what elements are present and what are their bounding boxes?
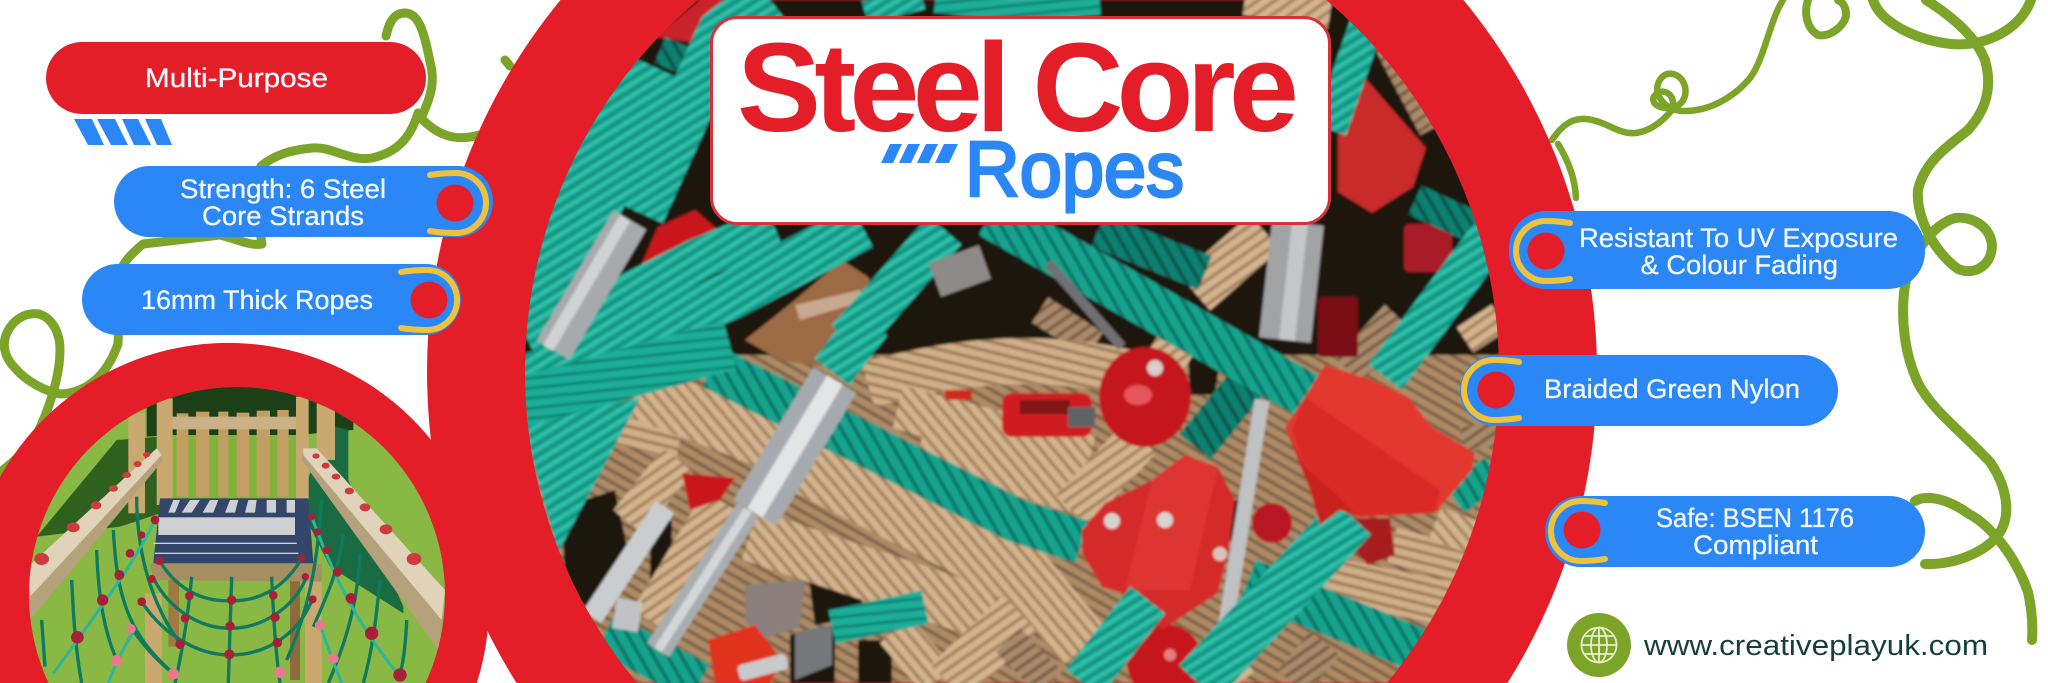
deck edge bbox=[150, 564, 322, 582]
grass bbox=[20, 380, 450, 683]
subtitle: Ropes: Ropes bbox=[965, 125, 1184, 213]
big red circle with photo bbox=[427, 0, 1597, 683]
icon: strength bullet bbox=[430, 173, 486, 233]
dark teal rope behind bbox=[1098, 230, 1205, 273]
decorative vine: left bbox=[0, 13, 510, 472]
icon: safe bullet bbox=[1551, 501, 1605, 561]
posts bbox=[128, 397, 335, 683]
pill: 16mm bbox=[82, 264, 461, 335]
right railing bbox=[302, 448, 445, 650]
red connector lower bbox=[1082, 455, 1235, 630]
red fittings behind ropes bbox=[608, 0, 1452, 565]
red ball bottom bbox=[1127, 624, 1203, 683]
pill: Braided: Braided Green Nylon bbox=[1544, 374, 1800, 404]
icon: 16mm bullet bbox=[401, 270, 457, 330]
upper tan ropes bbox=[1000, 0, 1500, 370]
pill: Braided bbox=[1460, 355, 1838, 426]
red ring: inset bbox=[0, 343, 489, 683]
pill: Resistant: & Colour Fading bbox=[1640, 250, 1838, 280]
silver ferrules and rods bbox=[548, 218, 1300, 680]
title panel bbox=[712, 18, 1330, 224]
pill: Multi-Purpose: Multi-Purpose bbox=[145, 63, 328, 93]
red clip at bottom bbox=[708, 625, 782, 683]
railing knobs bbox=[34, 452, 421, 565]
left railing bbox=[28, 448, 163, 620]
dark gaps between ropes bbox=[562, 355, 1240, 683]
rod in front bbox=[1225, 400, 1262, 630]
pill: Strength: Core Strands bbox=[202, 201, 364, 231]
green side panels bbox=[307, 427, 403, 613]
accent stripes: title bbox=[881, 144, 958, 163]
pill: Resistant bbox=[1509, 211, 1925, 289]
title box bbox=[712, 17, 1330, 224]
tan ropes bbox=[610, 361, 1500, 683]
pill: Strength bbox=[114, 166, 493, 237]
pill: Safe bbox=[1545, 496, 1925, 567]
brown block bbox=[745, 260, 875, 367]
teal ropes in front bbox=[1083, 600, 1148, 683]
pill: 16mm: 16mm Thick Ropes bbox=[141, 285, 373, 315]
pill: Multi-Purpose bbox=[46, 42, 426, 114]
net joints bbox=[71, 513, 407, 682]
decorative vine: upper right thin bbox=[1552, 0, 1783, 198]
red connector large bbox=[1285, 365, 1475, 525]
pill: Resistant: Resistant To UV Exposure bbox=[1579, 223, 1898, 253]
icon: resistant bullet bbox=[1516, 221, 1570, 281]
red ring: large bbox=[427, 0, 1597, 683]
inset photo: rope bridge bbox=[20, 380, 450, 683]
deck bbox=[153, 498, 313, 563]
pill: Safe: Compliant bbox=[1693, 530, 1819, 560]
pill: Strength: Strength: 6 Steel bbox=[180, 174, 386, 204]
website address: www.creativeplayuk.com bbox=[1643, 630, 1988, 662]
accent stripes: blue bbox=[74, 119, 172, 145]
pill: Safe: Safe: BSEN 1176 bbox=[1656, 503, 1854, 533]
inset ring and photo bbox=[0, 343, 489, 683]
far fence bbox=[170, 410, 297, 497]
trees and shade bbox=[146, 387, 354, 437]
net ropes bbox=[42, 497, 407, 683]
silver bolt on clip bbox=[737, 653, 789, 681]
red ball bbox=[1099, 347, 1191, 447]
brown highlights bbox=[795, 290, 868, 320]
highlighted joints bbox=[111, 620, 339, 680]
teal ropes bbox=[522, 0, 1495, 683]
photo: steel core ropes bbox=[520, 0, 1510, 683]
icon: braided bullet bbox=[1464, 360, 1519, 420]
decorative vine: top small loop bbox=[1806, 0, 1846, 35]
title: Steel Core: Steel Core bbox=[737, 17, 1299, 158]
website icon: globe bbox=[1567, 613, 1631, 677]
decorative vine: right large bbox=[1873, 0, 2032, 640]
